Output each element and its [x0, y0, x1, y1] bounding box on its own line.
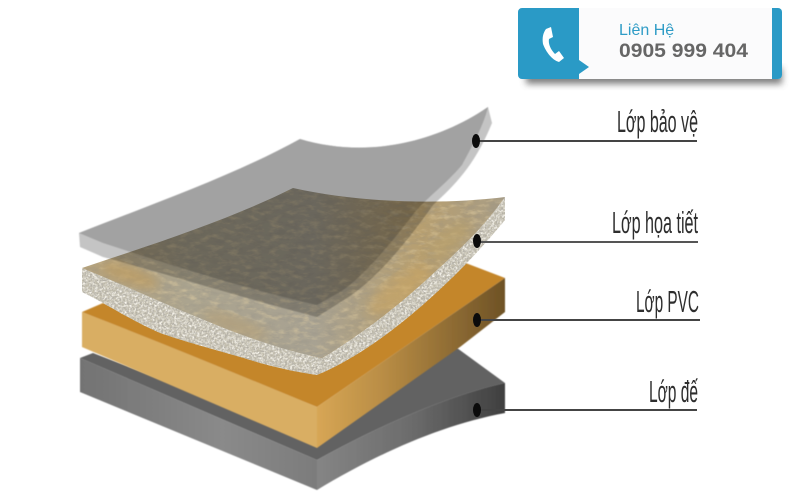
label: lớp bảo vệ: Lớp bảo vệ	[617, 104, 698, 139]
card phone tab	[518, 8, 589, 79]
icon: phone	[543, 27, 564, 62]
card right accent	[772, 8, 782, 79]
card shadow	[526, 68, 782, 84]
card body	[518, 8, 782, 79]
layer: pattern (lớp họa tiết)	[80, 185, 510, 380]
contact card	[518, 8, 782, 84]
text: Lớp PVC	[636, 284, 699, 319]
connector: lớp đế	[473, 403, 697, 417]
connector: lớp PVC	[473, 313, 700, 327]
label: lớp đế: Lớp đế	[649, 374, 698, 409]
contact phone number: 0905 999 404	[619, 41, 748, 62]
connector: lớp họa tiết	[473, 234, 698, 248]
layer: base (lớp đế)	[80, 340, 505, 490]
layer: protective (lớp bảo vệ)	[79, 107, 492, 317]
label: lớp họa tiết: Lớp họa tiết	[612, 205, 698, 240]
layer: PVC (lớp PVC)	[82, 262, 505, 448]
contact label: Liên Hệ	[619, 22, 674, 39]
connector: lớp bảo vệ	[472, 134, 697, 148]
